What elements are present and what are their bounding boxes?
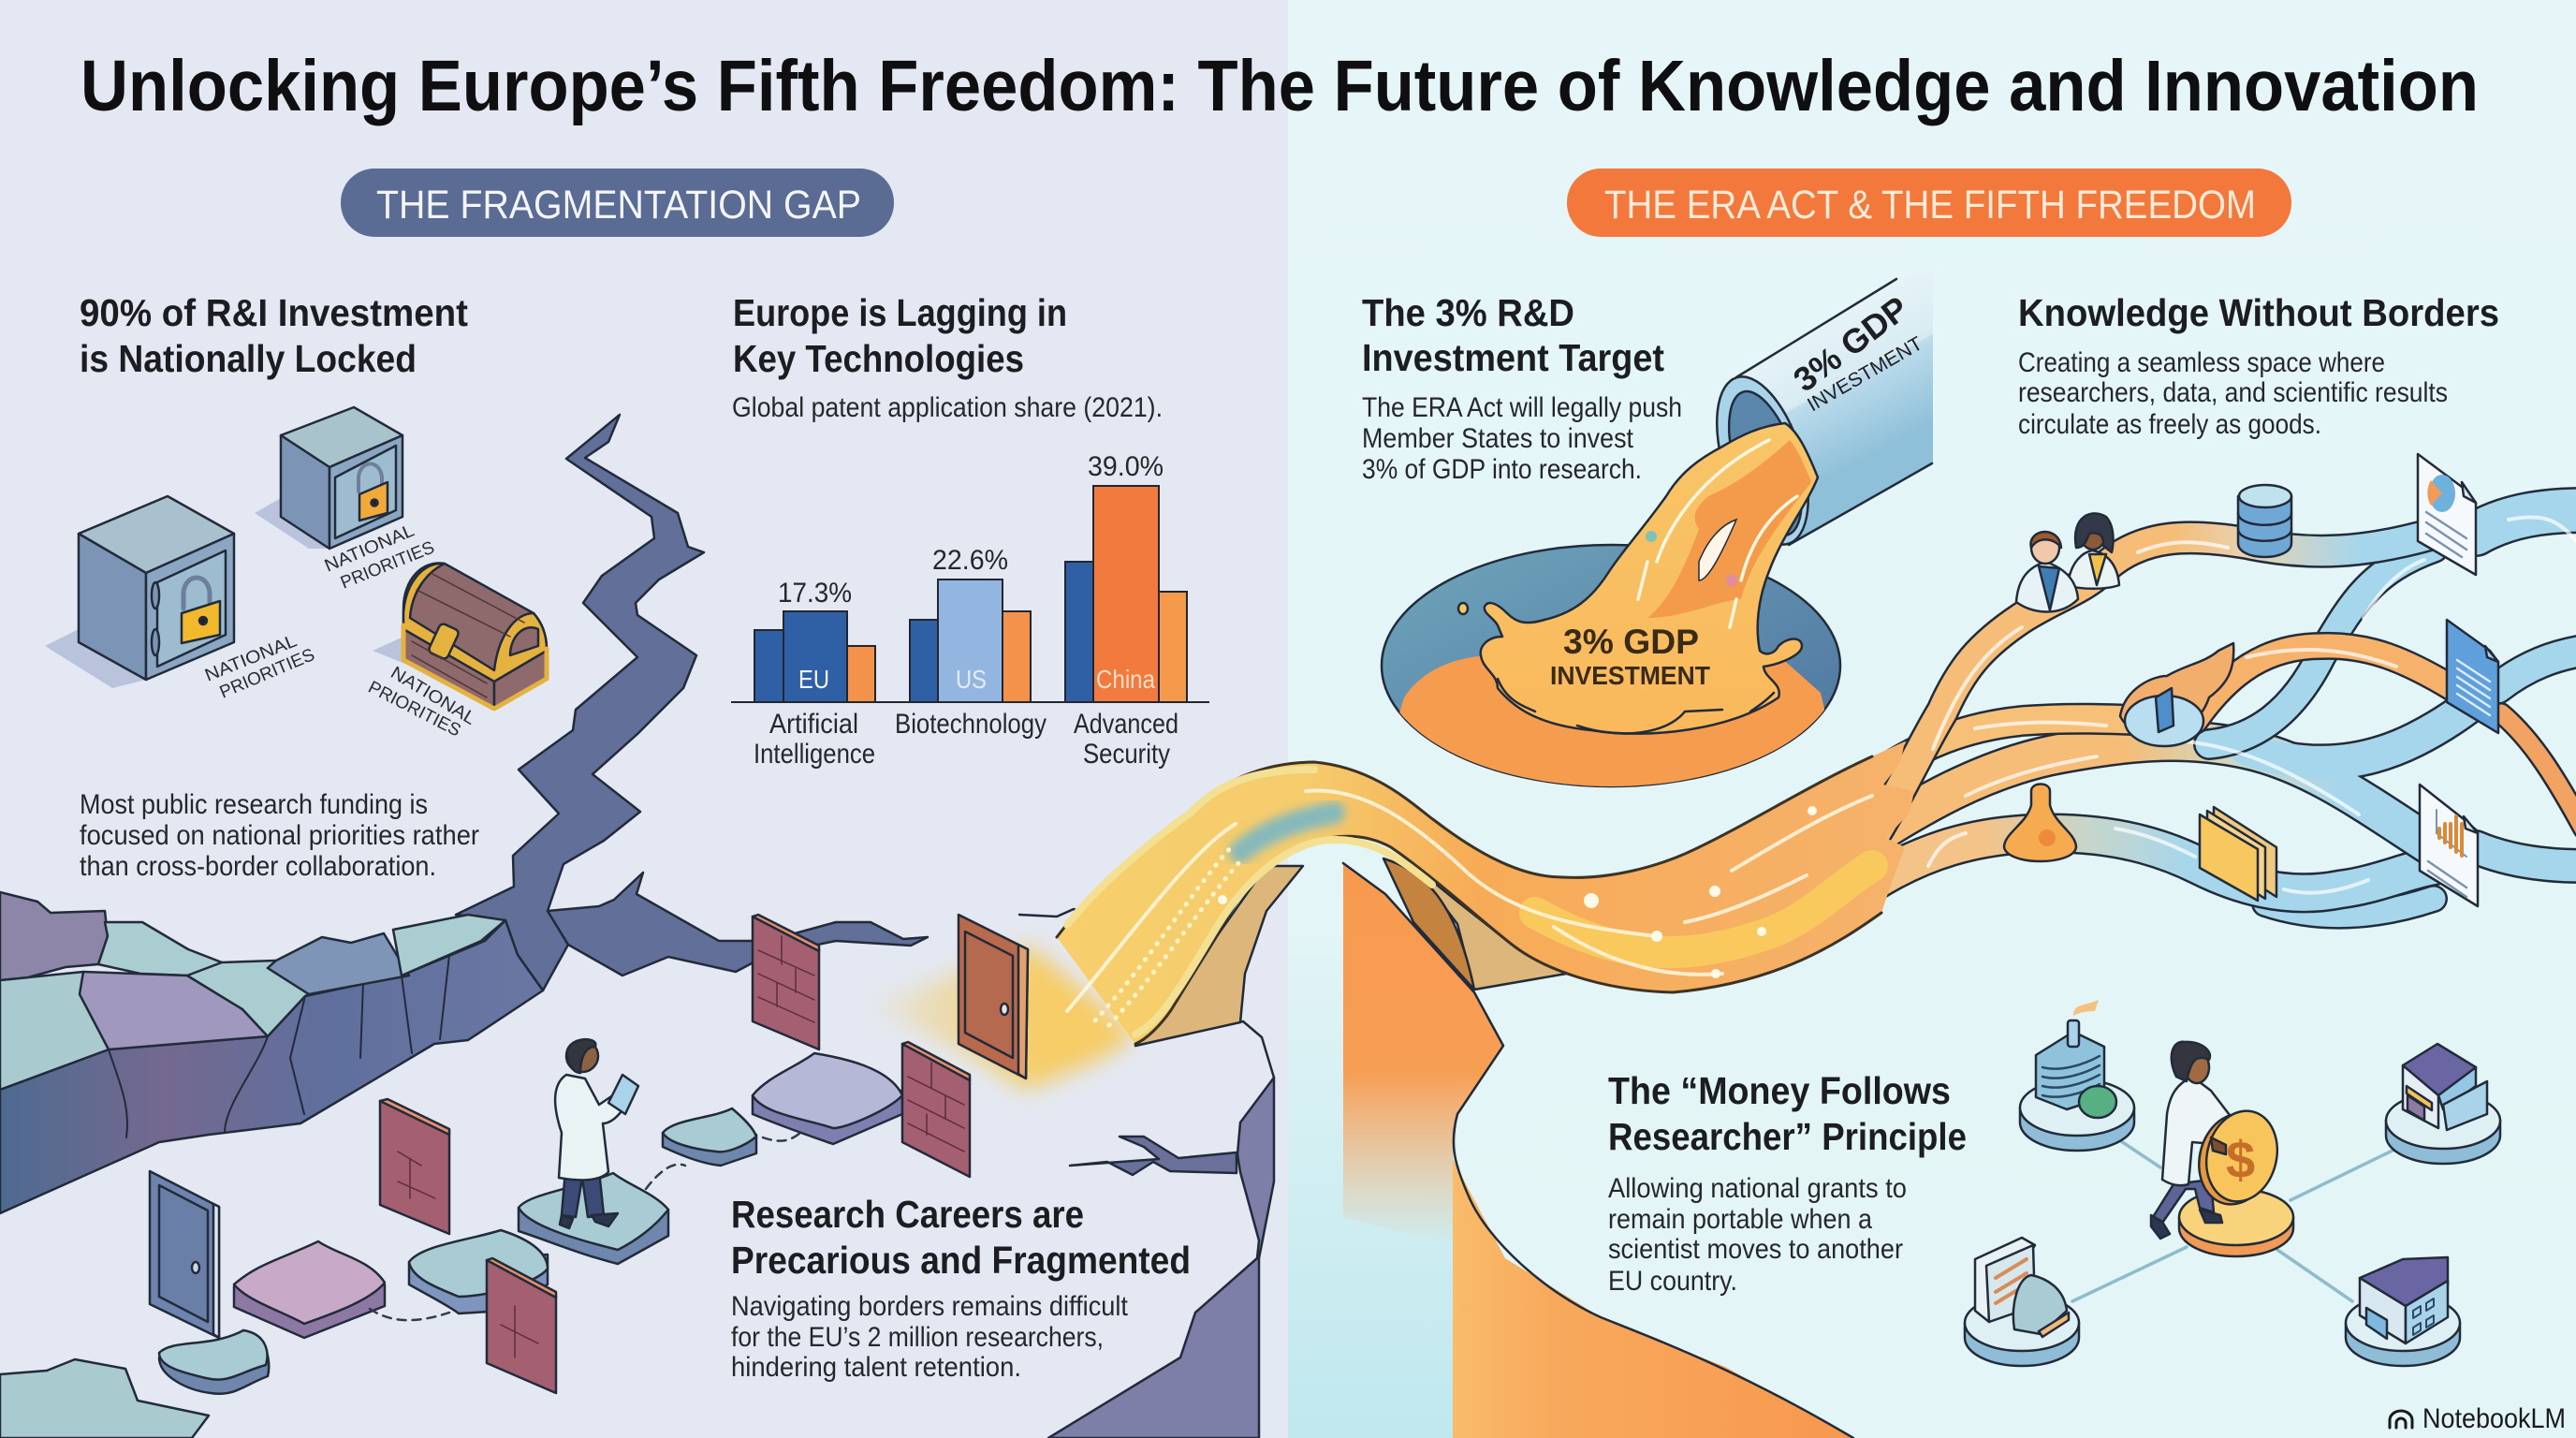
strand: seven [1849,833,2576,899]
heading: money follows researcher: The “Money Follows [1608,1069,1951,1112]
logo: NotebookLM [2390,1403,2566,1434]
stone: pink [234,1241,385,1338]
body text: research careers: for the EU’s 2 million researchers, [731,1322,1104,1353]
body text: ERA act: 3% of GDP into research. [1362,454,1642,485]
illustration: right cliff of fragmented land [1048,1078,1274,1438]
illustration: zigzag crack [456,415,704,990]
axis labels: Security [1083,739,1170,770]
body text: ERA act: The ERA Act will legally push [1362,392,1682,423]
heading: research careers [731,1193,1191,1282]
bars: artificial intelligence [754,611,875,702]
figure: scientist on platform [555,1039,638,1228]
bar labels: EU, US, China [798,665,1155,694]
stone: scientist platform [519,1173,668,1264]
pill: the era act and the fifth freedom [1567,169,2291,237]
icon: dashed path [370,1133,800,1320]
heading: money follows researcher: Researcher” Principle [1608,1115,1967,1158]
pill: the fragmentation gap [341,169,894,237]
icon: blue document [2447,620,2498,733]
icon: document with bars [2420,785,2478,906]
label: national priorities, small safe: NATIONAL [322,521,417,577]
value labels: 22.6% [932,545,1008,576]
icon: database [2238,485,2291,557]
body text: seamless space: researchers, data, and scientific results [2018,377,2448,408]
body text: portable grants: remain portable when a [1608,1204,1872,1235]
label: national priorities, large safe [202,631,317,703]
background: right panel [1288,0,2576,1438]
ribbon body [1057,741,1914,1044]
strand: four [1849,719,2153,796]
illustration: teal land bottom left [0,1359,209,1438]
strand: one [1849,510,2576,875]
icon: document with pie chart [2418,454,2476,575]
value labels [778,451,1164,609]
heading: nationally locked: 90% of R&I Investment [80,291,468,334]
value labels: 39.0% [1088,451,1164,482]
body text: research careers [731,1291,1129,1383]
icon: blue door [150,1171,219,1338]
bar labels: EU, US, China: China [1096,665,1155,694]
disc: south west with books [1965,1238,2079,1366]
strand highlights [1928,517,2576,893]
pill: the fragmentation gap: THE FRAGMENTATION GAP [376,183,861,227]
axis labels: Intelligence [754,739,875,770]
label: 3 percent GDP on liquid: 3% GDP [1563,623,1699,661]
heading: lagging: Europe is Lagging in [733,291,1067,334]
body text: seamless space: circulate as freely as goods. [2018,409,2321,440]
disc: south east with house [2346,1257,2460,1366]
bar labels: EU, US, China: US [956,665,987,694]
disc: north west with lab building [2020,1000,2134,1151]
strand: three, orange arch [2195,646,2576,829]
illustration: land crack right [1070,1137,1237,1175]
bar labels: EU, US, China: EU [798,665,829,694]
icon: folder [2200,807,2276,901]
body text: funding: focused on national priorities rather [80,820,479,851]
disc: central gold [2179,1189,2293,1256]
panel: nationally locked heading and text [80,291,479,882]
illustration: land edge line [1135,1021,1274,1078]
panel: knowledge without borders [2004,291,2499,906]
illustration: puzzle map plateau [0,892,505,1090]
body text: seamless space [2018,347,2448,440]
ribbon outlines [1057,756,1881,1044]
icon: flask [2004,785,2076,861]
label: national priorities, small safe: PRIORITIES [338,537,437,594]
icon: treasure chest [373,564,547,709]
icon: brick wall b [487,1258,556,1393]
body text: seamless space: Creating a seamless space where [2018,347,2385,378]
panel: lagging in key technologies [731,291,1209,770]
label: dollar on coin: $ [2226,1130,2255,1189]
ribbon data dots [1095,847,1240,1025]
heading: 3 percent target: The 3% R&D [1362,291,1574,334]
heading: research careers: Research Careers are [731,1193,1084,1236]
label: national priorities, large safe: PRIORITIES [217,645,317,703]
panel: 3 percent R&D target [1362,271,1933,791]
illustration: knowledge flow bridge [1057,741,1914,1044]
heading: knowledge without borders: Knowledge Without Borders [2018,291,2499,334]
panel: research careers obstacles [150,915,1191,1394]
icon: brick wall a [380,1099,449,1234]
icon: brown door [959,915,1028,1078]
label: national priorities, large safe: NATIONAL [202,631,300,686]
text on pipe: INVESTMENT [1804,332,1926,416]
heading: lagging: Key Technologies [733,337,1024,380]
strands: five and six [1849,651,2576,852]
panel: money follows researcher [1608,1000,2500,1366]
bars: biotechnology [910,580,1031,702]
label: investment on liquid: INVESTMENT [1550,661,1710,690]
ribbon warm band [1535,866,1872,952]
ribbon sparkles [1218,806,1817,978]
icon: device with flame [2120,643,2233,746]
heading: 3 percent target [1362,291,1664,379]
stone: teal upper [663,1108,756,1166]
icon: notebook arcs [2390,1411,2412,1428]
axis labels [754,709,1178,770]
body text: portable grants: scientist moves to another [1608,1234,1903,1265]
strand: two to first document [2209,548,2434,744]
background: left panel [0,0,1288,1438]
value labels: 17.3% [778,578,852,609]
illustration: pit [1382,545,1840,786]
figure: researcher with coin [2151,1042,2287,1239]
body text: research careers: hindering talent retention. [731,1352,1021,1383]
stone: small teal [159,1330,269,1394]
icon: brick wall c [753,915,819,1049]
illustration: bridge supports [1135,858,1577,1046]
heading: research careers: Precarious and Fragmented [731,1239,1191,1282]
connector lines [2072,1137,2400,1301]
body text: portable grants [1608,1173,1907,1297]
heading line two: is Nationally Locked [80,337,417,380]
body text: portable grants: EU country. [1608,1266,1737,1297]
label: national priorities, chest: PRIORITIES [365,678,463,741]
ribbon streaks [1067,790,1872,1011]
background: gap strip [1288,936,1456,1438]
label: national priorities, chest: NATIONAL [387,663,479,729]
network: flowing strands [1849,510,2576,916]
axis labels: Advanced [1074,709,1178,740]
stone: teal middle [409,1230,548,1313]
ribbon edge bands [1067,770,1432,1034]
text on pipe: 3% GDP [1786,288,1915,399]
illustration: orange cliff lower [1453,1159,1853,1438]
label: national priorities, small safe [322,521,437,594]
body text: funding: than cross-border collaboration. [80,851,436,882]
illustration: crack tail behind walls [548,873,928,976]
heading: 3 percent target: Investment Target [1362,336,1664,379]
icon: large safe [45,496,234,688]
illustration: orange cliff edge line [1343,863,1853,1438]
icon: pipe [1699,271,1933,555]
illustration: cliff face [0,920,543,1213]
heading: lagging [733,291,1067,380]
disc: north east with building [2386,1044,2500,1164]
icon: brick wall d [902,1042,970,1177]
bars: advanced security [1065,486,1187,702]
icon: researchers [2016,513,2119,612]
body text: funding: Most public research funding is [80,789,428,820]
body text: funding [80,789,479,882]
stone: lilac [753,1053,902,1144]
pill: the era act and the fifth freedom: THE ERA ACT & THE FIFTH FREEDOM [1604,183,2256,227]
subtitle: patent share: Global patent application share (2021). [732,392,1163,423]
axis labels: Biotechnology [895,709,1046,740]
heading: money follows researcher [1608,1069,1967,1158]
strand: bottom blue [2265,899,2434,916]
illustration: small crack near door [1019,909,1090,917]
ribbon teal shimmer [1240,813,1334,852]
illustration: glow from door [866,946,1137,1091]
chart baseline [731,701,1209,703]
illustration: orange cliff upper [1343,863,1503,1245]
icon: small safe [255,407,402,549]
body text: ERA act [1362,392,1682,485]
body text: research careers: Navigating borders remains difficult [731,1291,1129,1322]
illustration: pool [1399,656,1825,786]
axis labels: Artificial [769,709,858,740]
body text: ERA act: Member States to invest [1362,423,1634,454]
body text: portable grants: Allowing national grants to [1608,1173,1907,1204]
illustration: pouring liquid [1458,423,1818,734]
bar chart [731,486,1209,702]
